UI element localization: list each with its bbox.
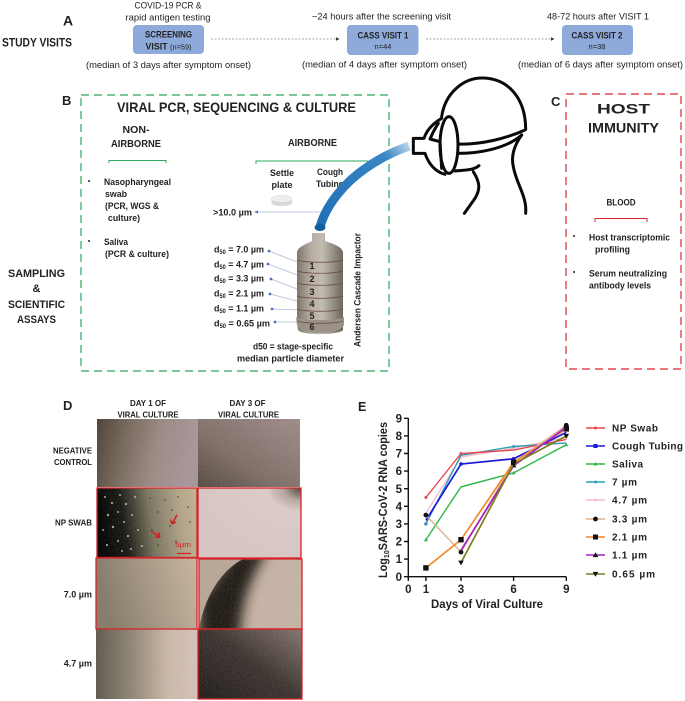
column: non-airborne samples: NON-	[122, 125, 150, 136]
column heading: airborne samples: AIRBORNE	[288, 138, 337, 149]
column: non-airborne samples	[88, 125, 171, 260]
row heading: sampling and scientific assays: ASSAYS	[17, 314, 56, 326]
row heading: sampling and scientific assays	[8, 268, 65, 326]
chart axes: 0	[396, 572, 402, 584]
icon: settle plate dish	[271, 196, 292, 206]
panel C dashed frame	[566, 94, 681, 369]
series: 3.3 micron	[424, 423, 569, 554]
chart axes	[396, 414, 570, 596]
column heading: day 1: DAY 1 OF	[130, 398, 166, 408]
column: non-airborne samples: culture)	[108, 213, 140, 224]
chart axes: 7	[396, 448, 402, 460]
icon: head wearing mask	[413, 78, 526, 213]
series: 0.65 micron	[458, 434, 569, 565]
series: 7 micron	[424, 443, 566, 525]
box: CASS visit 1: CASS VISIT 1	[358, 30, 408, 40]
box: CASS visit 2: CASS VISIT 2	[572, 30, 622, 40]
stage-specific size labels with arrows: = 4.7 µm	[226, 260, 264, 270]
note: 24 hours after screening: ~24 hours after the screening visit	[312, 12, 451, 22]
micrograph: negative control day 1	[97, 419, 198, 487]
Andersen cascade impactor: 4	[309, 299, 315, 309]
note: testing before screening	[126, 0, 210, 24]
y axis title: SARS-CoV-2 RNA copies	[378, 422, 390, 550]
box: CASS visit 2	[562, 25, 633, 55]
arrow: screening to visit 1	[211, 37, 340, 41]
panel C title: IMMUNITY	[588, 120, 660, 136]
micrograph: NP swab day 1: 5µm	[175, 540, 191, 549]
Andersen cascade impactor: 2	[309, 274, 315, 284]
blood assay list: Host transcriptomic	[589, 232, 670, 244]
panel label A: A	[63, 12, 73, 28]
row labels: CONTROL	[54, 457, 92, 467]
micrograph: 4.7 micron day 1	[96, 629, 198, 699]
stage-specific size labels with arrows: = 1.1 µm	[226, 304, 264, 314]
blood heading and bracket	[595, 198, 647, 222]
Andersen cascade impactor: 6	[309, 322, 315, 332]
note: testing before screening: rapid antigen testing	[126, 12, 210, 24]
blood assay list: profiling	[595, 244, 630, 256]
box: screening visit: SCREENING	[145, 30, 192, 40]
panel label B: B	[62, 93, 71, 108]
stage-specific size labels with arrows: d	[214, 318, 220, 330]
chart legend: Cough Tubing	[612, 442, 683, 452]
micrograph: NP swab day 3	[198, 488, 301, 558]
panel label D: D	[63, 398, 72, 413]
panel E: RNA copies line chart	[358, 400, 683, 611]
series: NP swab	[424, 439, 566, 499]
chart legend: 3.3 µm	[612, 514, 647, 526]
note: 48-72 hours after visit 1: 48-72 hours after VISIT 1	[547, 12, 649, 22]
column: non-airborne samples: (PCR & culture)	[105, 249, 169, 260]
micrograph: NP swab day 1	[97, 488, 197, 557]
chart axes: 9	[396, 414, 402, 426]
chart axes: 6	[510, 584, 517, 596]
stage-specific size labels with arrows: = 0.65 µm	[226, 318, 270, 330]
chart legend: 0.65 µm	[612, 570, 655, 580]
row labels: 4.7 µm	[64, 658, 92, 668]
medians after symptom onset: (median of 4 days after symptom onset)	[302, 60, 467, 70]
micrograph: 7.0 micron day 3	[200, 560, 302, 628]
row labels: NP SWAB	[55, 518, 92, 528]
column: non-airborne samples: AIRBORNE	[111, 139, 161, 150]
box: screening visit	[133, 25, 204, 54]
micrograph: 4.7 micron day 3	[198, 629, 302, 699]
blood assay list: antibody levels	[589, 280, 651, 292]
stage-specific size labels with arrows: 50	[219, 294, 226, 300]
chart axes: 4	[396, 502, 403, 514]
chart axes: 0	[405, 584, 412, 596]
medians after symptom onset: (median of 6 days after symptom onset)	[518, 60, 683, 70]
label: settle plate: plate	[272, 180, 292, 191]
stage-specific size labels with arrows: 50	[219, 309, 226, 315]
series: 2.1 micron	[423, 426, 569, 571]
stage-specific size labels with arrows: = 3.3 µm	[226, 274, 264, 284]
stage-specific size labels with arrows	[214, 244, 297, 330]
panel C: host immunity	[551, 94, 681, 369]
micrograph: negative control day 3	[198, 419, 300, 487]
row labels	[53, 446, 92, 668]
x axis title: Days of Viral Culture	[431, 599, 543, 611]
row heading: sampling and scientific assays: SAMPLING	[8, 268, 65, 280]
panel D: viral culture micrographs	[53, 398, 302, 699]
panel label E: E	[358, 400, 366, 414]
note: d50 definition: median particle diameter	[237, 354, 344, 364]
arrow: visit 1 to visit 2	[426, 37, 554, 41]
stage-specific size labels with arrows: d	[214, 274, 220, 284]
red highlight frames on positive cultures	[96, 488, 302, 699]
stage-specific size labels with arrows: = 7.0 µm	[226, 244, 264, 256]
stage-specific size labels with arrows: d	[214, 244, 220, 256]
column: non-airborne samples: swab	[105, 189, 127, 200]
blood assay list: Serum neutralizing	[589, 268, 667, 280]
chart legend: 4.7 µm	[612, 496, 647, 506]
series: saliva	[424, 443, 568, 541]
column heading: day 1: VIRAL CULTURE	[118, 410, 179, 420]
row heading: sampling and scientific assays: &	[33, 283, 41, 295]
micrograph texture	[96, 419, 302, 699]
note: testing before screening: COVID-19 PCR &	[134, 0, 202, 12]
note: d50 definition: d50 = stage-specific	[253, 342, 333, 352]
column heading: day 3	[218, 398, 279, 420]
column heading: day 3: VIRAL CULTURE	[218, 410, 279, 420]
chart legend: 2.1 µm	[612, 532, 647, 544]
panel A: study visits timeline	[2, 0, 683, 71]
stage-specific size labels with arrows: 50	[220, 324, 227, 330]
chart axes: 1	[396, 554, 403, 566]
label: cough tubing: Tubing	[316, 179, 344, 190]
box: CASS visit 1	[347, 25, 418, 55]
series lines and markers	[423, 423, 569, 571]
chart axes: 3	[458, 584, 464, 596]
column heading: day 3: DAY 3 OF	[230, 398, 266, 408]
chart axes: 5	[396, 484, 403, 496]
column: non-airborne samples: Nasopharyngeal	[104, 177, 171, 188]
panel B: viral PCR, sequencing and culture	[62, 93, 409, 371]
label: settle plate: Settle	[270, 168, 294, 179]
chart axes: 2	[396, 536, 402, 548]
medians after symptom onset	[86, 60, 683, 71]
stage-specific size labels with arrows: 50	[219, 279, 226, 285]
box: CASS visit 1: n=44	[375, 42, 391, 51]
stage-specific size labels with arrows: 50	[219, 265, 226, 271]
row heading: sampling and scientific assays: SCIENTIFIC	[8, 299, 65, 311]
cough tubing	[314, 146, 409, 231]
stage-specific size labels with arrows: d	[214, 288, 220, 300]
panel B dashed frame	[81, 95, 389, 371]
series: 4.7 micron	[426, 438, 566, 513]
chart legend: Saliva	[612, 460, 643, 470]
series: 1.1 micron	[461, 424, 569, 550]
row heading: study visits: STUDY VISITS	[2, 38, 72, 50]
label: cough tubing: Cough	[317, 167, 343, 178]
vertical label: Andersen Cascade Impactor: Andersen Cascade Impactor	[352, 233, 364, 347]
label: greater than 10 micron with arrow	[213, 208, 327, 218]
panel B title: VIRAL PCR, SEQUENCING & CULTURE	[117, 99, 356, 115]
chart axes: 9	[563, 584, 570, 596]
chart legend: NP Swab	[612, 424, 658, 434]
panel C title: HOST	[597, 100, 651, 116]
Andersen cascade impactor: 3	[309, 287, 315, 297]
Andersen cascade impactor: 1	[309, 261, 315, 271]
chart legend: 7 µm	[612, 478, 637, 488]
micrograph: 7.0 micron day 1	[96, 558, 197, 629]
chart axes: 8	[396, 431, 403, 443]
stage-specific size labels with arrows: d	[214, 304, 220, 314]
medians after symptom onset: (median of 3 days after symptom onset)	[86, 60, 251, 71]
box: CASS visit 2: n=38	[589, 42, 605, 51]
chart legend	[586, 424, 683, 580]
column: non-airborne samples: (PCR, WGS &	[105, 201, 159, 212]
row labels: 7.0 µm	[64, 590, 92, 600]
panel C title	[588, 100, 660, 136]
stage-specific size labels with arrows: 50	[219, 250, 226, 256]
label: greater than 10 micron with arrow: >10.0 µm	[213, 208, 252, 218]
row labels: NEGATIVE	[53, 446, 92, 456]
Andersen cascade impactor	[296, 233, 344, 334]
panel label C: C	[551, 94, 561, 109]
column heading: day 1	[118, 398, 179, 420]
blood heading and bracket: BLOOD	[606, 198, 636, 208]
y axis title: Log	[378, 557, 390, 578]
column: non-airborne samples: Saliva	[104, 237, 129, 248]
Andersen cascade impactor: 5	[309, 311, 315, 321]
chart axes: 6	[396, 466, 402, 478]
stage-specific size labels with arrows: = 2.1 µm	[226, 288, 264, 300]
label: settle plate	[270, 168, 294, 191]
chart axes: 1	[423, 584, 430, 596]
chart axes: 3	[396, 519, 402, 531]
note: d50 definition	[237, 342, 344, 364]
y axis title: 10	[382, 550, 391, 558]
column heading: airborne samples	[256, 138, 368, 164]
chart legend: 1.1 µm	[612, 550, 647, 562]
series: cough tubing	[426, 432, 566, 520]
box: screening visit: VISIT (n=59)	[146, 42, 192, 52]
stage-specific size labels with arrows: d	[214, 260, 220, 270]
label: cough tubing	[316, 167, 344, 190]
blood assay list	[573, 232, 670, 292]
